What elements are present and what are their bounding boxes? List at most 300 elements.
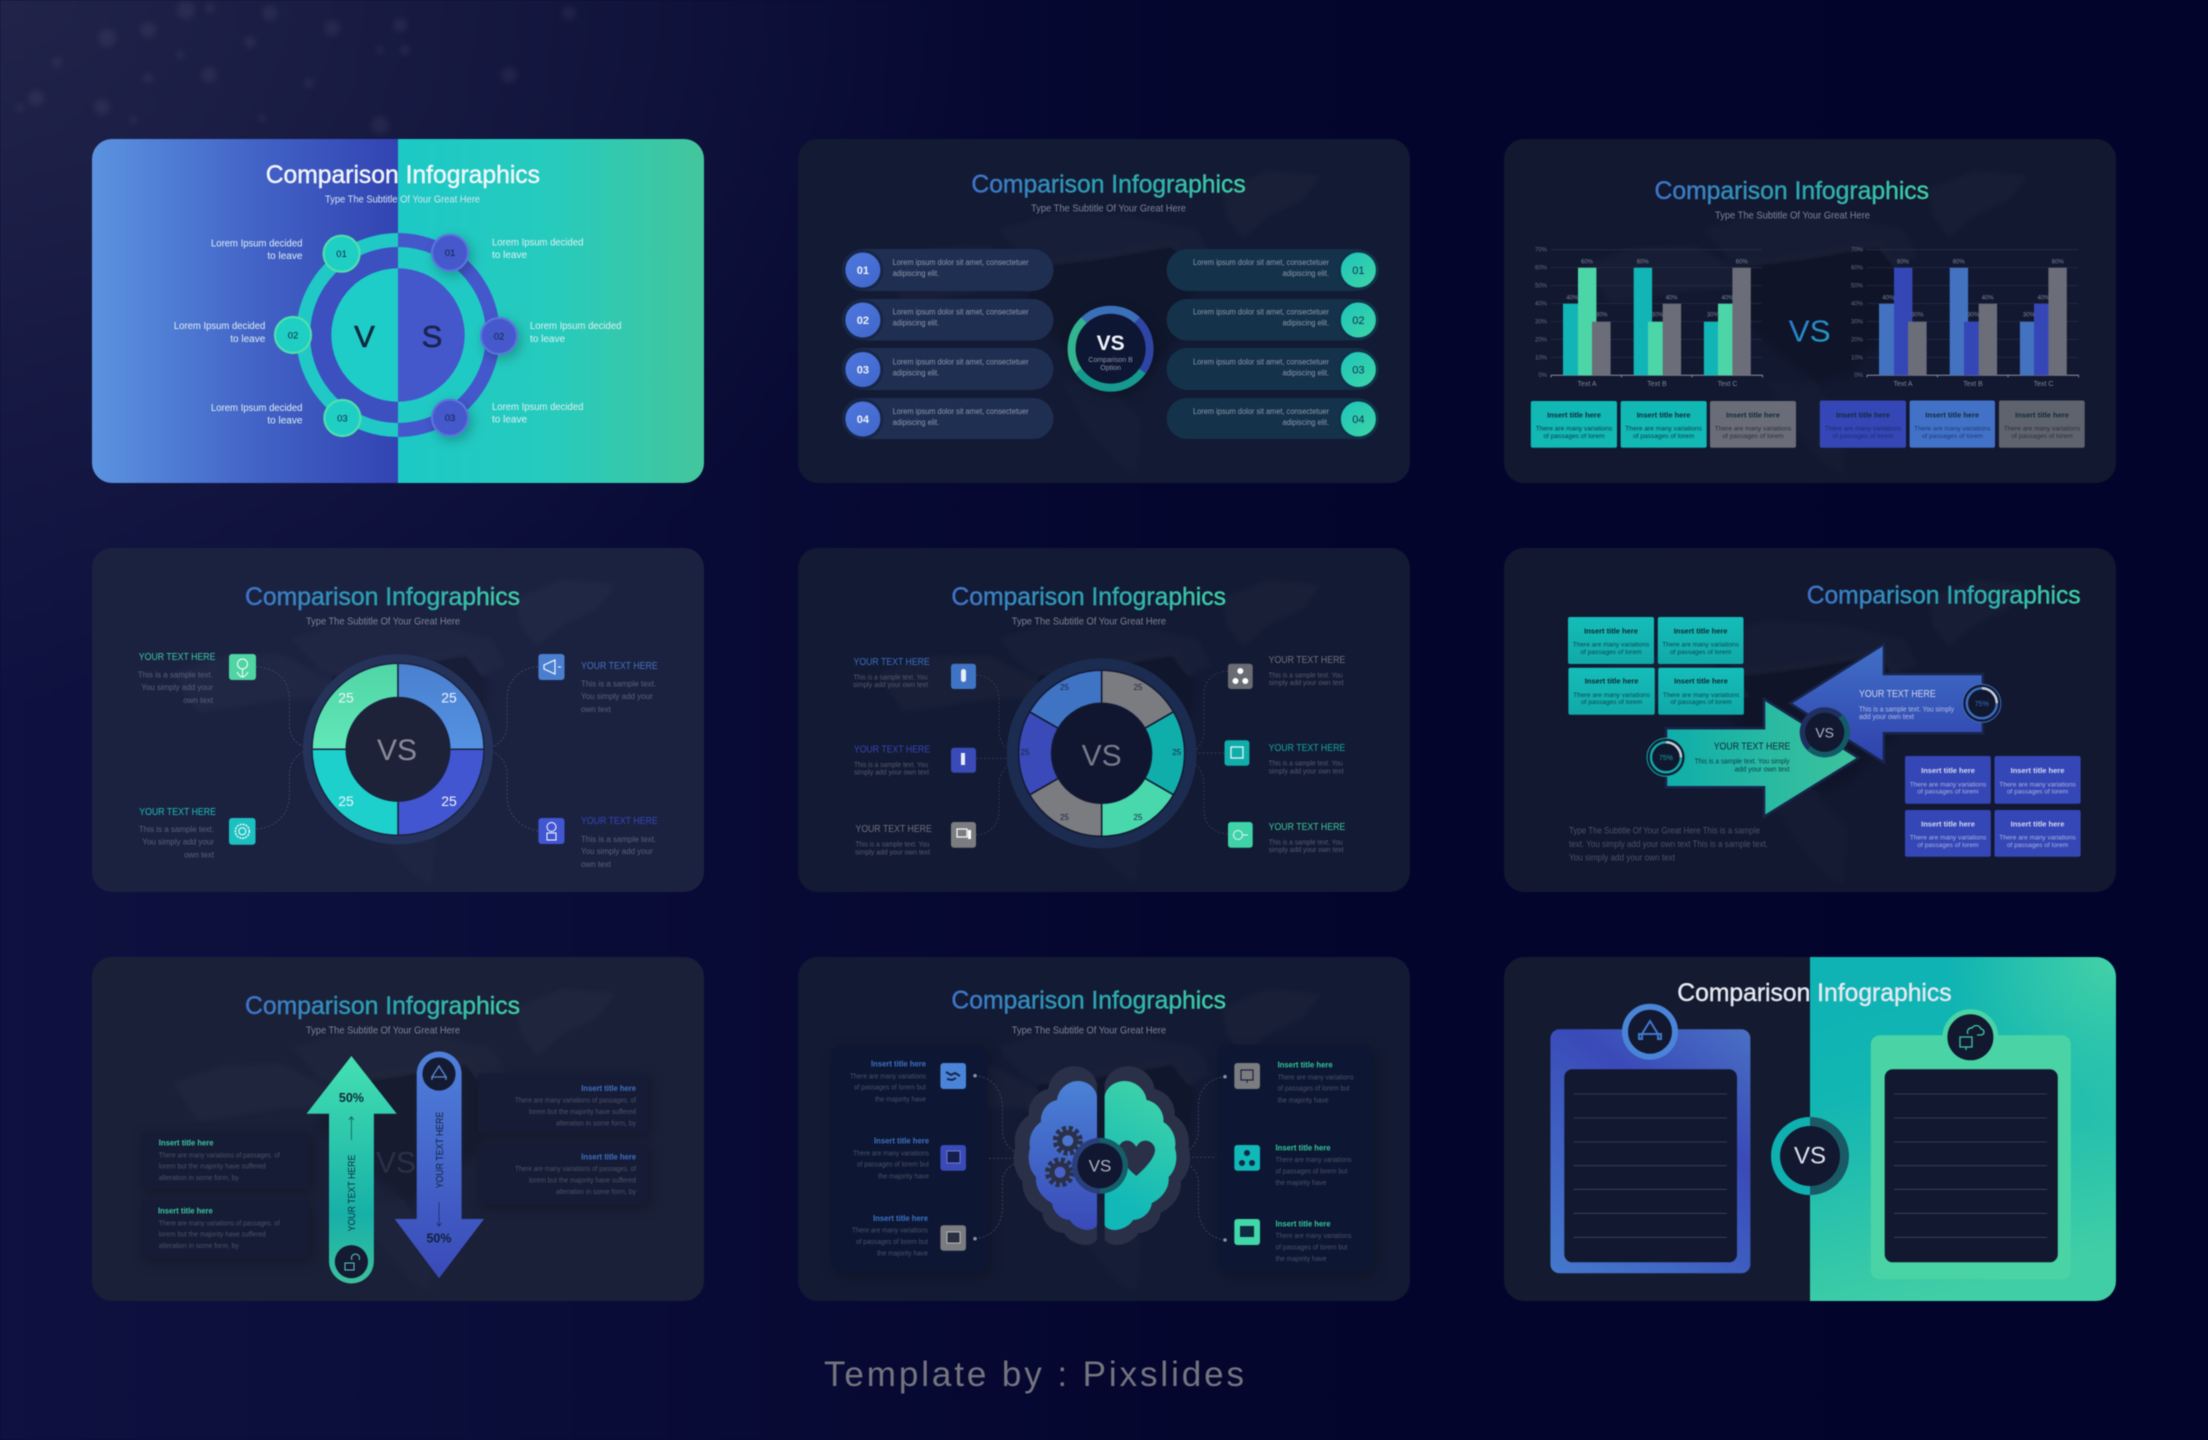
- bar chart: left: 40%: [1566, 296, 1579, 302]
- blue boxes: Insert title here: [2011, 820, 2064, 829]
- caption boxes: There are many variations: [2004, 426, 2081, 433]
- blue boxes: There are many variations: [1999, 835, 2076, 842]
- right card: There are many variations: [1278, 1072, 1354, 1081]
- item: top right: YOUR TEXT HERE: [581, 660, 658, 672]
- bar chart: right: 60%: [1851, 266, 1864, 272]
- bar chart: right: 0%: [1854, 373, 1864, 379]
- right labels: to leave: [492, 415, 527, 426]
- donut chart: VS: [377, 734, 417, 767]
- bar chart: left: 60%: [1736, 260, 1748, 266]
- caption boxes: of passages of lorem: [1722, 433, 1784, 440]
- bar chart: left: 40%: [1535, 302, 1548, 308]
- body text: You simply add your own text: [1569, 853, 1675, 863]
- teal boxes: There are many variations: [1573, 642, 1650, 649]
- right card: the majority have: [1276, 1254, 1326, 1263]
- left card: There are many variations: [852, 1226, 928, 1235]
- progress ring: left: [1647, 738, 1685, 776]
- bar chart: left: 40%: [1721, 296, 1734, 302]
- caption boxes: [1531, 400, 2085, 448]
- numbered nodes: 02: [288, 330, 298, 342]
- item: bottom left: You simply add your: [142, 838, 214, 847]
- item: top right: You simply add your: [581, 692, 653, 701]
- blue boxes: There are many variations: [1999, 781, 2076, 788]
- title: Comparison Infographics: [1654, 177, 1929, 205]
- arrow: blue left: This is a sample text. You simply: [1859, 706, 1954, 713]
- arrow: down: [395, 1052, 484, 1278]
- panel: clipboards: [1504, 957, 2116, 1301]
- bar chart: left: Text B: [1647, 381, 1667, 388]
- title: Comparison Infographics: [951, 583, 1226, 611]
- left labels: Lorem Ipsum decided: [211, 239, 302, 250]
- left card: There are many variations: [850, 1071, 926, 1080]
- bar chart: left: 30%: [1595, 313, 1608, 319]
- bar chart: left: Text C: [1718, 381, 1737, 388]
- subtitle: Type The Subtitle Of Your Great Here: [325, 194, 480, 206]
- left pills: 04: [857, 414, 870, 426]
- arrow: blue left: add your own text: [1859, 714, 1914, 721]
- right items: This is a sample text. You: [1269, 761, 1343, 768]
- item: top right: [538, 654, 658, 714]
- bar chart: left: 60%: [1581, 260, 1594, 266]
- bar chart: right: 30%: [1967, 313, 1980, 319]
- bar chart: right: 10%: [1851, 355, 1864, 361]
- body text: text. You simply add your own text This is a sample text.: [1569, 839, 1768, 849]
- right text boxes: There are many variations of passages. of: [515, 1164, 637, 1173]
- arrow: up: 50%: [339, 1091, 364, 1105]
- connectors: [256, 667, 538, 831]
- donut chart: [303, 654, 493, 844]
- arrow: up: [306, 1056, 397, 1283]
- donut chart: 25: [1134, 683, 1143, 692]
- bar chart: right: 30%: [1911, 313, 1924, 319]
- bar chart: left: 70%: [1535, 248, 1548, 254]
- right items: This is a sample text. You: [1269, 672, 1343, 679]
- item: bottom right: [538, 815, 658, 869]
- clipboard: right: [1871, 1012, 2071, 1279]
- right labels: [492, 238, 621, 426]
- left card: the majority have: [877, 1249, 928, 1258]
- right pills: 04: [1352, 414, 1365, 426]
- bar chart: left: 30%: [1707, 313, 1720, 319]
- right text boxes: Insert title here: [581, 1152, 636, 1162]
- right text boxes: alteration in some form, by: [556, 1187, 636, 1196]
- panel: brain: [798, 957, 1410, 1301]
- footer credit: Template by : Pixslides: [824, 1355, 1244, 1394]
- bar chart: right: 40%: [1882, 296, 1895, 302]
- right items: simply add your own text: [1269, 847, 1344, 854]
- left text boxes: lorem but the majority have suffered: [159, 1162, 266, 1171]
- numbered nodes: 01: [336, 249, 347, 260]
- left pills: Lorem ipsum dolor sit amet, consectetuer: [893, 357, 1029, 366]
- left card: Insert title here: [874, 1136, 929, 1146]
- title: Comparison Infographics: [1677, 979, 1952, 1007]
- right text boxes: alteration in some form, by: [556, 1119, 636, 1128]
- donut chart: 25: [1172, 748, 1182, 757]
- right pills: [1166, 249, 1378, 439]
- right pills: Lorem ipsum dolor sit amet, consectetuer: [1193, 357, 1329, 366]
- left labels: [174, 239, 303, 427]
- item: top left: own text: [183, 696, 214, 705]
- left items: simply add your own text: [853, 682, 928, 689]
- blue boxes: of passages of lorem: [2007, 842, 2069, 849]
- arrow: blue left: [1790, 644, 1983, 763]
- right pills: adipiscing elit.: [1282, 269, 1329, 278]
- right items: simply add your own text: [1269, 768, 1344, 775]
- progress ring: right: 75%: [1975, 701, 1989, 708]
- bar chart: left: 20%: [1535, 337, 1548, 343]
- left text boxes: alteration in some form, by: [159, 1241, 239, 1250]
- item: bottom left: [139, 806, 256, 860]
- panel: six-part donut: [798, 548, 1410, 892]
- right labels: Lorem Ipsum decided: [492, 238, 583, 249]
- VS circle chart: V: [354, 319, 375, 354]
- left card: of passages of lorem but: [854, 1083, 927, 1092]
- teal boxes: of passages of lorem: [1670, 649, 1732, 656]
- teal boxes: of passages of lorem: [1580, 649, 1642, 656]
- right labels: to leave: [492, 250, 527, 261]
- VS badge: Comparison B: [1088, 357, 1133, 364]
- donut chart: 25: [1134, 813, 1143, 822]
- right pills: 03: [1352, 364, 1365, 376]
- bar chart: left: 0%: [1538, 373, 1548, 379]
- left pills: adipiscing elit.: [893, 368, 939, 377]
- caption boxes: of passages of lorem: [1543, 433, 1605, 440]
- left text boxes: There are many variations of passages. of: [159, 1218, 281, 1227]
- title: Comparison Infographics: [951, 986, 1226, 1014]
- item: bottom right: own text: [581, 860, 612, 869]
- left card: of passages of lorem but: [857, 1160, 930, 1169]
- subtitle: Type The Subtitle Of Your Great Here: [1715, 209, 1870, 221]
- left labels: to leave: [267, 416, 303, 427]
- numbered nodes: 02: [494, 332, 504, 342]
- caption boxes: Insert title here: [2015, 410, 2069, 419]
- right card: of passages of lorem but: [1276, 1166, 1348, 1175]
- caption boxes: There are many variations: [1914, 426, 1991, 433]
- bar chart: right: Text A: [1893, 381, 1913, 388]
- blue boxes: There are many variations: [1910, 835, 1987, 842]
- caption boxes: of passages of lorem: [1922, 433, 1983, 440]
- numbered nodes: 03: [445, 413, 455, 424]
- panel: pill list: [798, 139, 1410, 483]
- bar chart: right: 40%: [1982, 296, 1994, 302]
- subtitle: Type The Subtitle Of Your Great Here: [1031, 203, 1186, 215]
- arrow: teal right: add your own text: [1735, 766, 1790, 773]
- right labels: Lorem Ipsum decided: [530, 321, 621, 332]
- caption boxes: There are many variations: [1536, 426, 1613, 433]
- left text boxes: alteration in some form, by: [159, 1173, 239, 1182]
- blue boxes: Insert title here: [1921, 766, 1975, 775]
- left pills: 02: [857, 315, 869, 327]
- title: Comparison Infographics: [245, 992, 520, 1020]
- numbered nodes: 03: [337, 414, 348, 424]
- VS badge: VS: [1815, 724, 1834, 740]
- right items: YOUR TEXT HERE: [1269, 742, 1345, 754]
- blue boxes: There are many variations: [1910, 781, 1987, 788]
- subtitle: Type The Subtitle Of Your Great Here: [306, 615, 460, 627]
- left items: simply add your own text: [855, 849, 930, 856]
- right text boxes: [478, 1073, 648, 1204]
- left items: simply add your own text: [854, 770, 929, 777]
- left pills: adipiscing elit.: [893, 319, 939, 328]
- VS badge: [1771, 1117, 1849, 1195]
- VS badge: [1072, 310, 1150, 388]
- connectors: [976, 671, 1228, 835]
- bar chart: right: Text C: [2034, 381, 2053, 388]
- arrow: teal right: This is a sample text. You simply: [1695, 759, 1790, 766]
- right text boxes: Insert title here: [581, 1083, 636, 1093]
- item: bottom right: You simply add your: [581, 847, 653, 856]
- right text boxes: There are many variations of passages. of: [515, 1096, 637, 1105]
- caption boxes: of passages of lorem: [1832, 433, 1894, 440]
- blue boxes: of passages of lorem: [1917, 842, 1979, 849]
- right card: of passages of lorem but: [1278, 1084, 1350, 1093]
- right pills: adipiscing elit.: [1282, 319, 1329, 328]
- left pills: Lorem ipsum dolor sit amet, consectetuer: [893, 258, 1029, 267]
- teal boxes: of passages of lorem: [1581, 699, 1643, 706]
- bar chart: left: 30%: [1535, 320, 1548, 326]
- item: bottom right: YOUR TEXT HERE: [581, 815, 658, 827]
- subtitle: Type The Subtitle Of Your Great Here: [1012, 615, 1166, 627]
- left pills: 03: [857, 364, 869, 376]
- bar chart: right: Text B: [1963, 381, 1983, 388]
- brain illustration: [1014, 1066, 1190, 1245]
- donut chart: 25: [1021, 748, 1030, 757]
- right card: the majority have: [1278, 1095, 1329, 1104]
- item: top left: [138, 651, 256, 705]
- right card: Insert title here: [1276, 1142, 1331, 1152]
- body text: [1569, 825, 1768, 863]
- right card: Insert title here: [1276, 1218, 1331, 1228]
- caption boxes: Insert title here: [1637, 410, 1690, 419]
- left card: of passages of lorem but: [856, 1237, 929, 1246]
- caption boxes: There are many variations: [1625, 426, 1703, 433]
- left card: the majority have: [875, 1094, 926, 1103]
- bar chart: right: 60%: [2052, 260, 2064, 266]
- right pills: 02: [1352, 315, 1365, 327]
- right pills: 01: [1352, 265, 1365, 277]
- right card: [1218, 1045, 1373, 1272]
- bar chart: right: 30%: [2023, 313, 2036, 319]
- arrow: down: 50%: [426, 1231, 452, 1245]
- donut chart: [1007, 658, 1197, 848]
- title: Comparison Infographics: [266, 161, 540, 189]
- left items: YOUR TEXT HERE: [856, 823, 932, 835]
- left items: This is a sample text. You: [854, 762, 928, 769]
- donut chart: 25: [1060, 683, 1069, 692]
- right labels: Lorem Ipsum decided: [492, 402, 583, 413]
- right pills: Lorem ipsum dolor sit amet, consectetuer: [1193, 407, 1329, 416]
- left text boxes: There are many variations of passages. of: [159, 1150, 281, 1159]
- left card: There are many variations: [853, 1148, 929, 1157]
- bar chart: left: 60%: [1535, 266, 1548, 272]
- panel: opposing arrows: [1504, 548, 2116, 892]
- right items: simply add your own text: [1269, 680, 1344, 687]
- left labels: Lorem Ipsum decided: [211, 403, 302, 414]
- right labels: to leave: [530, 334, 565, 345]
- arrow: teal right: [1666, 699, 1859, 817]
- blue boxes: of passages of lorem: [2007, 788, 2069, 795]
- caption boxes: There are many variations: [1825, 426, 1902, 433]
- right text boxes: lorem but the majority have suffered: [529, 1107, 636, 1116]
- VS watermark: VS: [376, 1147, 416, 1180]
- item: bottom left: YOUR TEXT HERE: [139, 806, 216, 818]
- item: bottom right: This is a sample text.: [581, 835, 656, 844]
- left labels: to leave: [230, 334, 266, 345]
- left pills: 01: [857, 265, 869, 277]
- bar chart: left: 60%: [1637, 260, 1649, 266]
- subtitle: Type The Subtitle Of Your Great Here: [1012, 1024, 1166, 1036]
- teal boxes: Insert title here: [1674, 677, 1728, 686]
- VS circle chart: S: [422, 319, 442, 354]
- item: top right: own text: [581, 705, 612, 714]
- blue boxes: Insert title here: [1921, 820, 1975, 829]
- right items: [1224, 654, 1345, 854]
- right card: of passages of lorem but: [1276, 1242, 1348, 1251]
- bar chart: right: 60%: [1953, 260, 1965, 266]
- donut chart: 25: [1060, 813, 1069, 822]
- donut chart: VS: [1082, 740, 1122, 773]
- teal boxes: of passages of lorem: [1670, 699, 1732, 706]
- panel: vertical arrows: [92, 957, 704, 1301]
- bar chart: right: 40%: [1851, 302, 1864, 308]
- VS circle chart: [296, 233, 500, 437]
- bar chart: left: 50%: [1535, 284, 1548, 290]
- VS badge: [1800, 707, 1850, 757]
- VS: VS: [1789, 314, 1831, 349]
- left pills: adipiscing elit.: [893, 269, 939, 278]
- left text boxes: Insert title here: [158, 1205, 213, 1215]
- bar chart: right: 50%: [1851, 284, 1864, 290]
- caption boxes: Insert title here: [1726, 410, 1780, 419]
- left card: Insert title here: [873, 1213, 928, 1223]
- bar chart: right: 70%: [1851, 248, 1864, 254]
- caption boxes: There are many variations: [1715, 426, 1792, 433]
- caption boxes: Insert title here: [1836, 410, 1890, 419]
- donut chart: 25: [338, 690, 354, 706]
- numbered nodes: [275, 235, 517, 436]
- bar chart: right: 40%: [2037, 296, 2050, 302]
- item: top left: You simply add your: [141, 683, 213, 692]
- VS badge: Option: [1100, 365, 1121, 372]
- bar chart: left: 10%: [1535, 355, 1548, 361]
- right items: YOUR TEXT HERE: [1269, 654, 1345, 666]
- right text boxes: lorem but the majority have suffered: [529, 1176, 636, 1185]
- item: top left: This is a sample text.: [138, 671, 213, 680]
- donut chart: 25: [441, 793, 457, 809]
- arrow: teal right: YOUR TEXT HERE: [1714, 740, 1790, 752]
- bar chart: left: [1535, 248, 1763, 388]
- bar chart: right: 30%: [1851, 320, 1864, 326]
- right card: There are many variations: [1276, 1155, 1352, 1164]
- panel: circle VS: [92, 139, 704, 483]
- left pills: [842, 249, 1054, 439]
- left card: the majority have: [878, 1171, 929, 1180]
- left text boxes: Insert title here: [159, 1138, 214, 1148]
- title: Comparison Infographics: [245, 583, 520, 611]
- bar chart: right: 60%: [1897, 260, 1910, 266]
- title: Comparison Infographics: [971, 171, 1246, 199]
- left items: This is a sample text. You: [856, 842, 930, 849]
- right pills: adipiscing elit.: [1282, 368, 1329, 377]
- left pills: Lorem ipsum dolor sit amet, consectetuer: [893, 407, 1029, 416]
- right card: Insert title here: [1278, 1060, 1333, 1070]
- arrow: down: YOUR TEXT HERE: [434, 1112, 446, 1188]
- panel: four-part donut: [92, 548, 704, 892]
- caption boxes: Insert title here: [1547, 410, 1601, 419]
- left items: YOUR TEXT HERE: [854, 744, 930, 756]
- left items: This is a sample text. You: [854, 674, 928, 681]
- left text boxes: [141, 1132, 309, 1258]
- subtitle: Type The Subtitle Of Your Great Here: [306, 1024, 460, 1036]
- left pills: adipiscing elit.: [893, 418, 939, 427]
- item: bottom left: own text: [184, 851, 215, 860]
- left card: Insert title here: [871, 1059, 926, 1069]
- blue boxes: [1905, 756, 2081, 857]
- connectors: [973, 1074, 1227, 1242]
- blue boxes: Insert title here: [2011, 766, 2064, 775]
- right card: There are many variations: [1276, 1231, 1352, 1240]
- teal boxes: There are many variations: [1663, 692, 1740, 699]
- left items: YOUR TEXT HERE: [854, 656, 930, 668]
- VS badge: [1072, 1138, 1128, 1194]
- right items: This is a sample text. You: [1269, 839, 1343, 846]
- teal boxes: Insert title here: [1674, 627, 1727, 636]
- teal boxes: There are many variations: [1573, 692, 1651, 699]
- bar chart: left: 30%: [1651, 313, 1664, 319]
- teal boxes: There are many variations: [1662, 642, 1740, 649]
- donut chart: 25: [441, 690, 457, 706]
- arrow: up: YOUR TEXT HERE: [346, 1155, 358, 1231]
- bar chart: left: Text A: [1577, 381, 1597, 388]
- numbered nodes: 01: [445, 248, 455, 259]
- left text boxes: lorem but the majority have suffered: [159, 1230, 266, 1239]
- teal boxes: [1568, 617, 1744, 715]
- right pills: Lorem ipsum dolor sit amet, consectetuer: [1193, 308, 1329, 317]
- panel: bar charts: [1504, 139, 2116, 483]
- item: top left: YOUR TEXT HERE: [139, 651, 215, 663]
- body text: Type The Subtitle Of Your Great Here This is a sample: [1569, 825, 1760, 835]
- left card: [831, 1045, 987, 1272]
- arrow: blue left: YOUR TEXT HERE: [1859, 688, 1936, 700]
- caption boxes: Insert title here: [1925, 410, 1979, 419]
- item: bottom left: This is a sample text.: [139, 825, 214, 834]
- bar chart: right: 20%: [1851, 337, 1864, 343]
- right pills: Lorem ipsum dolor sit amet, consectetuer: [1193, 258, 1329, 267]
- right card: the majority have: [1276, 1178, 1326, 1187]
- right items: YOUR TEXT HERE: [1269, 821, 1345, 833]
- VS badge: VS: [1089, 1157, 1111, 1176]
- title: Comparison Infographics: [1807, 581, 2081, 609]
- teal boxes: Insert title here: [1585, 677, 1638, 686]
- caption boxes: of passages of lorem: [2011, 433, 2073, 440]
- progress ring: right: [1963, 684, 2001, 722]
- left labels: Lorem Ipsum decided: [174, 321, 265, 332]
- left items: [853, 656, 976, 856]
- teal boxes: Insert title here: [1584, 627, 1638, 636]
- bar chart: right: [1851, 248, 2079, 388]
- right pills: adipiscing elit.: [1282, 418, 1329, 427]
- bar chart: left: 40%: [1666, 296, 1678, 302]
- VS badge: VS: [1097, 332, 1125, 355]
- left labels: to leave: [267, 251, 303, 262]
- blue boxes: of passages of lorem: [1917, 788, 1979, 795]
- donut chart: 25: [338, 793, 354, 809]
- VS badge: VS: [1794, 1142, 1826, 1169]
- left pills: Lorem ipsum dolor sit amet, consectetuer: [893, 308, 1029, 317]
- clipboard: left: [1550, 1007, 1750, 1273]
- item: top right: This is a sample text.: [581, 680, 656, 689]
- caption boxes: of passages of lorem: [1633, 433, 1695, 440]
